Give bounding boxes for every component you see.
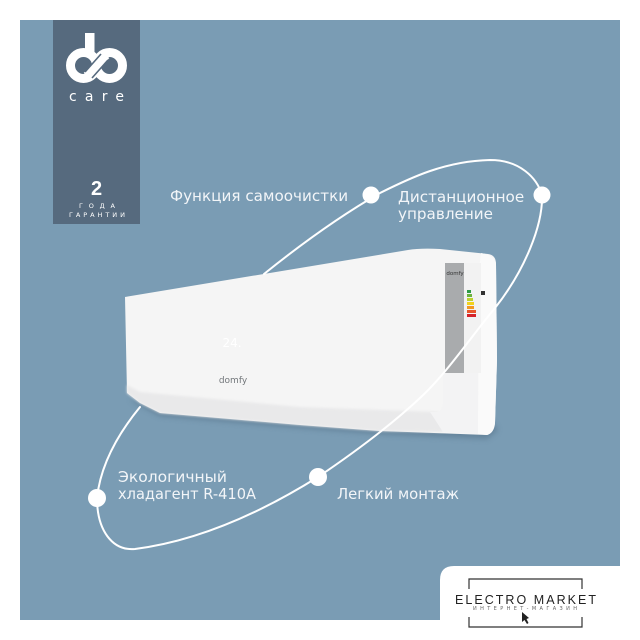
brand caption: care xyxy=(69,89,124,105)
label: refrigerant: Экологичный xyxy=(118,468,227,486)
warranty number: 2 xyxy=(91,178,102,200)
energy label xyxy=(445,263,485,373)
icon: cursor xyxy=(522,612,529,624)
energy label: domfy xyxy=(446,271,464,277)
icon: brand logo xyxy=(70,33,122,78)
label: self-cleaning: Функция самоочистки xyxy=(170,187,348,205)
brand name: domfy xyxy=(219,376,248,386)
label: remote control: управление xyxy=(398,205,493,223)
air conditioner unit xyxy=(125,249,498,439)
warranty caption: ГОДА xyxy=(79,202,116,210)
seller tagline: ИНТЕРНЕТ-МАГАЗИН xyxy=(473,606,577,612)
marker: installation xyxy=(309,468,327,486)
label: refrigerant: хладагент R-410A xyxy=(118,485,257,503)
label: remote control: Дистанционное xyxy=(398,188,524,206)
display: 24. xyxy=(222,336,242,350)
label: installation: Легкий монтаж xyxy=(337,485,459,503)
seller frame xyxy=(469,579,582,627)
warranty panel xyxy=(53,20,140,224)
marker: refrigerant xyxy=(88,489,106,507)
marker: self-cleaning xyxy=(362,186,380,204)
seller name: ELECTRO MARKET xyxy=(455,593,596,607)
orbit ellipse xyxy=(97,160,542,549)
seller badge xyxy=(440,566,640,640)
warranty caption: ГАРАНТИИ xyxy=(69,211,125,219)
marker: remote control xyxy=(534,186,550,204)
